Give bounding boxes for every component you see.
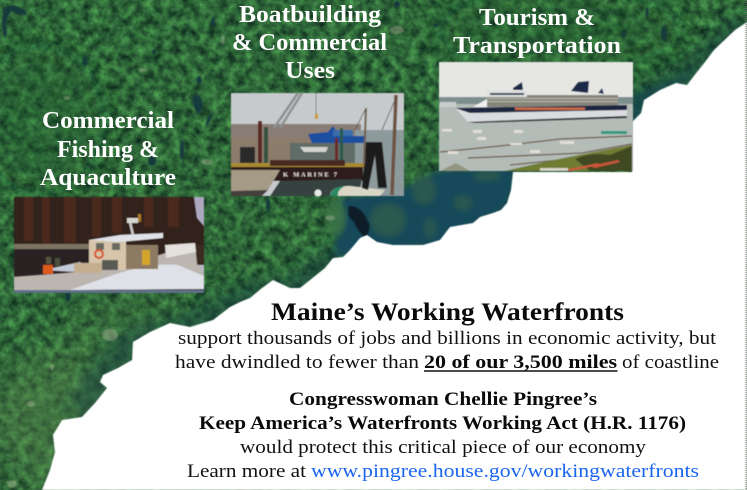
text block: jobs and coastline statistic: 20 of our 3,500 miles [424, 352, 617, 373]
text block: call to action with link [187, 437, 699, 482]
heading: tourism and transportation [453, 5, 621, 59]
towns [7, 26, 404, 488]
heading: commercial fishing and aquaculture: Aquaculture [40, 165, 176, 191]
text block: jobs and coastline statistic: support thousands of jobs and billions in economic activity, but [178, 328, 717, 349]
heading: commercial fishing and aquaculture [40, 108, 176, 191]
dotted right page edge [745, 0, 747, 490]
lakes [2, 1, 667, 302]
photo: boatyard and barge [231, 93, 404, 196]
text block: jobs and coastline statistic: have dwindled to fewer than [175, 352, 420, 373]
heading: boatbuilding and commercial uses: Uses [285, 58, 335, 84]
heading: boatbuilding and commercial uses: Boatbuilding [239, 2, 381, 28]
text block: jobs and coastline statistic: of coastline [622, 352, 719, 373]
heading: tourism and transportation: Transportation [453, 33, 621, 59]
heading: boatbuilding and commercial uses [232, 2, 387, 84]
dark coastal band [82, 24, 746, 417]
text block: congresswoman and bill: Congresswoman Chellie Pingree’s [289, 389, 597, 410]
title: Maine’s Working Waterfronts [271, 297, 624, 326]
heading: commercial fishing and aquaculture: Fishing & [57, 137, 159, 163]
heading: commercial fishing and aquaculture: Commercial [42, 108, 174, 134]
text block: call to action with link: would protect this critical piece of our economy [240, 437, 647, 458]
bay water with islands [326, 70, 700, 258]
heading: boatbuilding and commercial uses: & Commercial [232, 30, 387, 56]
text block: congresswoman and bill: Keep America’s Waterfronts Working Act (H.R. 1176) [199, 413, 686, 434]
photo: boatyard and barge: K MARINE 7 [283, 172, 338, 178]
text block: call to action with link: Learn more at [187, 461, 307, 482]
heading: tourism and transportation: Tourism & [479, 5, 595, 31]
photo: cruise ship and marina [439, 62, 633, 171]
text block: congresswoman and bill [199, 389, 686, 434]
photo: lobster boat [14, 197, 204, 293]
text block: jobs and coastline statistic [175, 328, 719, 373]
text block: call to action with link: www.pingree.house.gov/workingwaterfronts [311, 461, 699, 482]
